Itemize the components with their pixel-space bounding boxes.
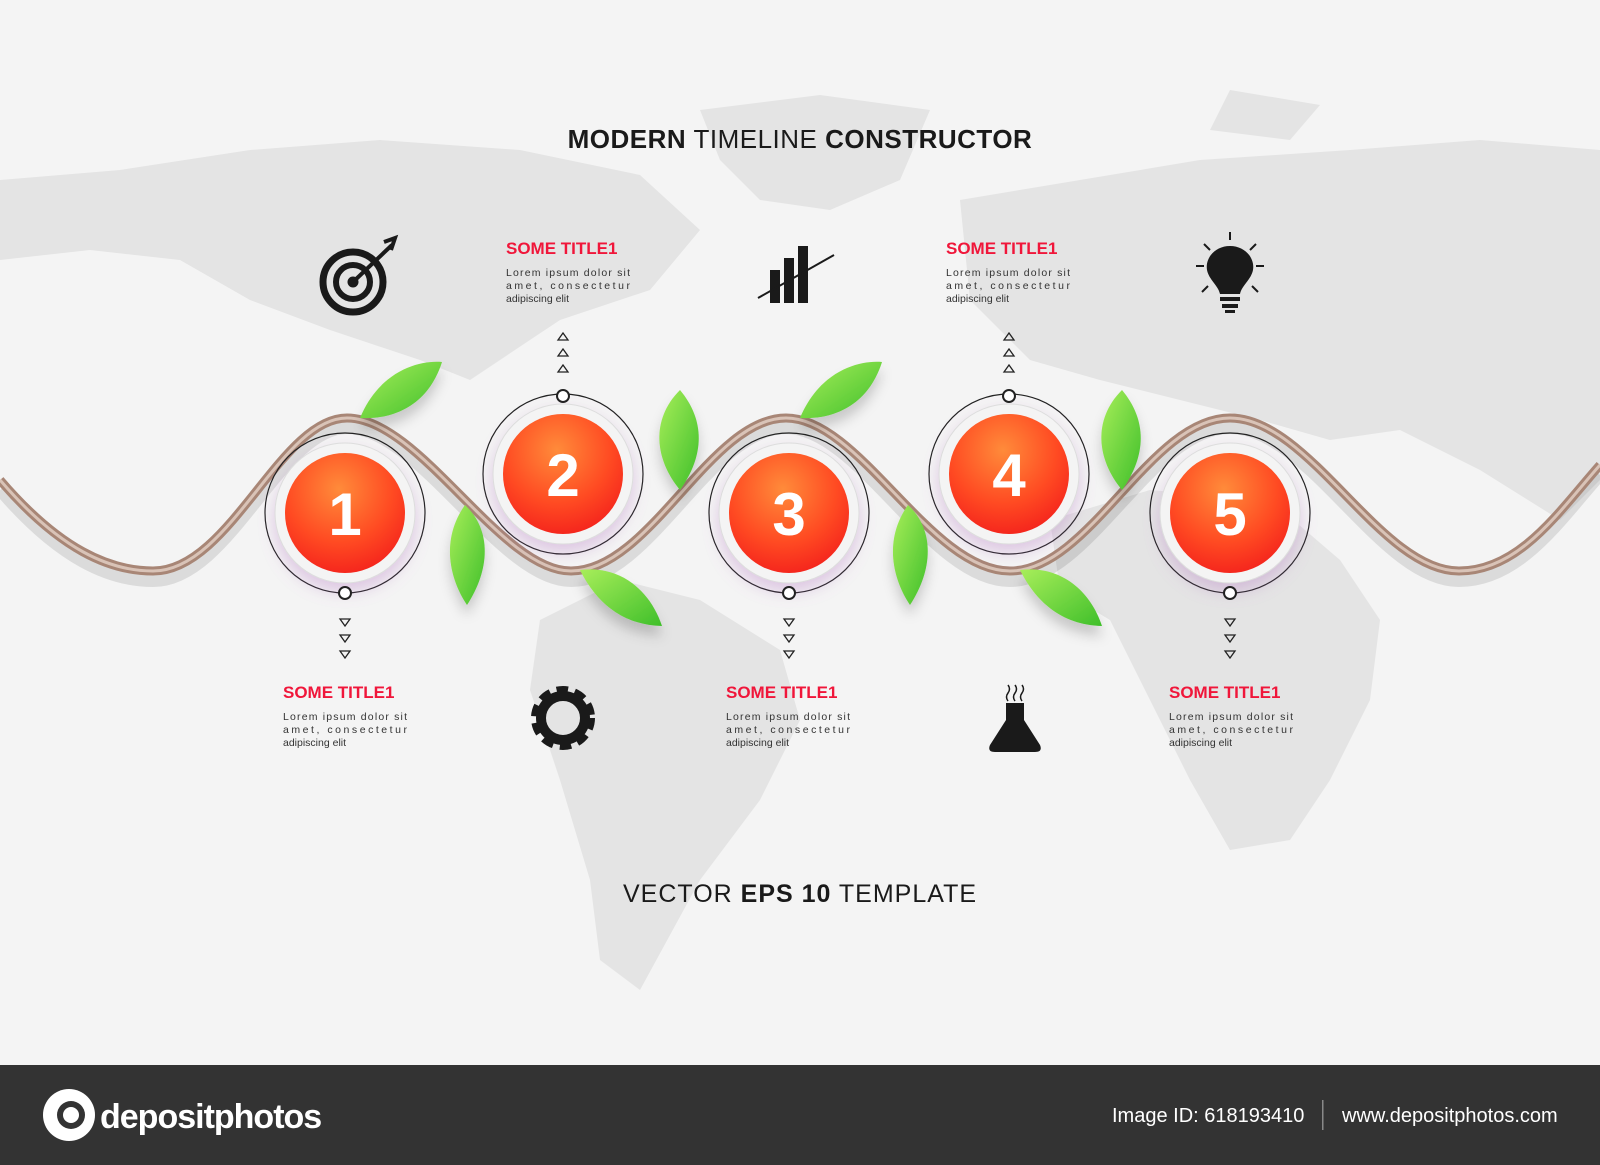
bottom bar: Image ID: 618193410 — [1112, 1105, 1304, 1127]
text blocks: amet, consectetur — [283, 724, 408, 736]
text blocks: amet, consectetur — [946, 280, 1070, 292]
icon: target — [323, 238, 395, 312]
title: MODERN TIMELINE CONSTRUCTOR — [568, 124, 1032, 154]
step circles — [265, 390, 1310, 599]
arrows — [340, 333, 1235, 658]
text blocks: adipiscing elit — [946, 293, 1009, 305]
background world map — [0, 90, 1600, 990]
text blocks: SOME TITLE1 — [1169, 683, 1280, 702]
text blocks: adipiscing elit — [283, 737, 346, 749]
text blocks: adipiscing elit — [1169, 737, 1232, 749]
text blocks: Lorem ipsum dolor sit — [283, 711, 407, 723]
bottom bar — [0, 1065, 1600, 1165]
step circles: 2 — [546, 442, 580, 509]
bottom bar: www.depositphotos.com — [1341, 1105, 1558, 1127]
wave timeline — [0, 418, 1600, 581]
step circles: 4 — [992, 442, 1026, 509]
text blocks: SOME TITLE1 — [946, 239, 1057, 258]
icon: light bulb — [1196, 232, 1264, 313]
text blocks — [283, 239, 1294, 749]
text blocks: Lorem ipsum dolor sit — [506, 267, 630, 279]
text blocks: amet, consectetur — [726, 724, 850, 736]
step circles: 5 — [1213, 481, 1247, 548]
leaves — [360, 362, 1141, 626]
icon: flask — [989, 685, 1041, 752]
text blocks: SOME TITLE1 — [506, 239, 617, 258]
bottom bar: depositphotos — [100, 1098, 321, 1136]
footer caption: VECTOR EPS 10 TEMPLATE — [623, 880, 977, 908]
text blocks: adipiscing elit — [726, 737, 789, 749]
text blocks: amet, consectetur — [1169, 724, 1294, 736]
step circles: 1 — [328, 481, 362, 548]
text blocks: Lorem ipsum dolor sit — [1169, 711, 1293, 723]
text blocks: adipiscing elit — [506, 293, 569, 305]
text blocks: Lorem ipsum dolor sit — [946, 267, 1070, 279]
step circles: 3 — [772, 481, 806, 548]
text blocks: Lorem ipsum dolor sit — [726, 711, 850, 723]
text blocks: SOME TITLE1 — [283, 683, 394, 702]
icon: gear — [538, 693, 588, 743]
icon: bar chart — [758, 246, 834, 303]
text blocks: SOME TITLE1 — [726, 683, 837, 702]
text blocks: amet, consectetur — [506, 280, 630, 292]
